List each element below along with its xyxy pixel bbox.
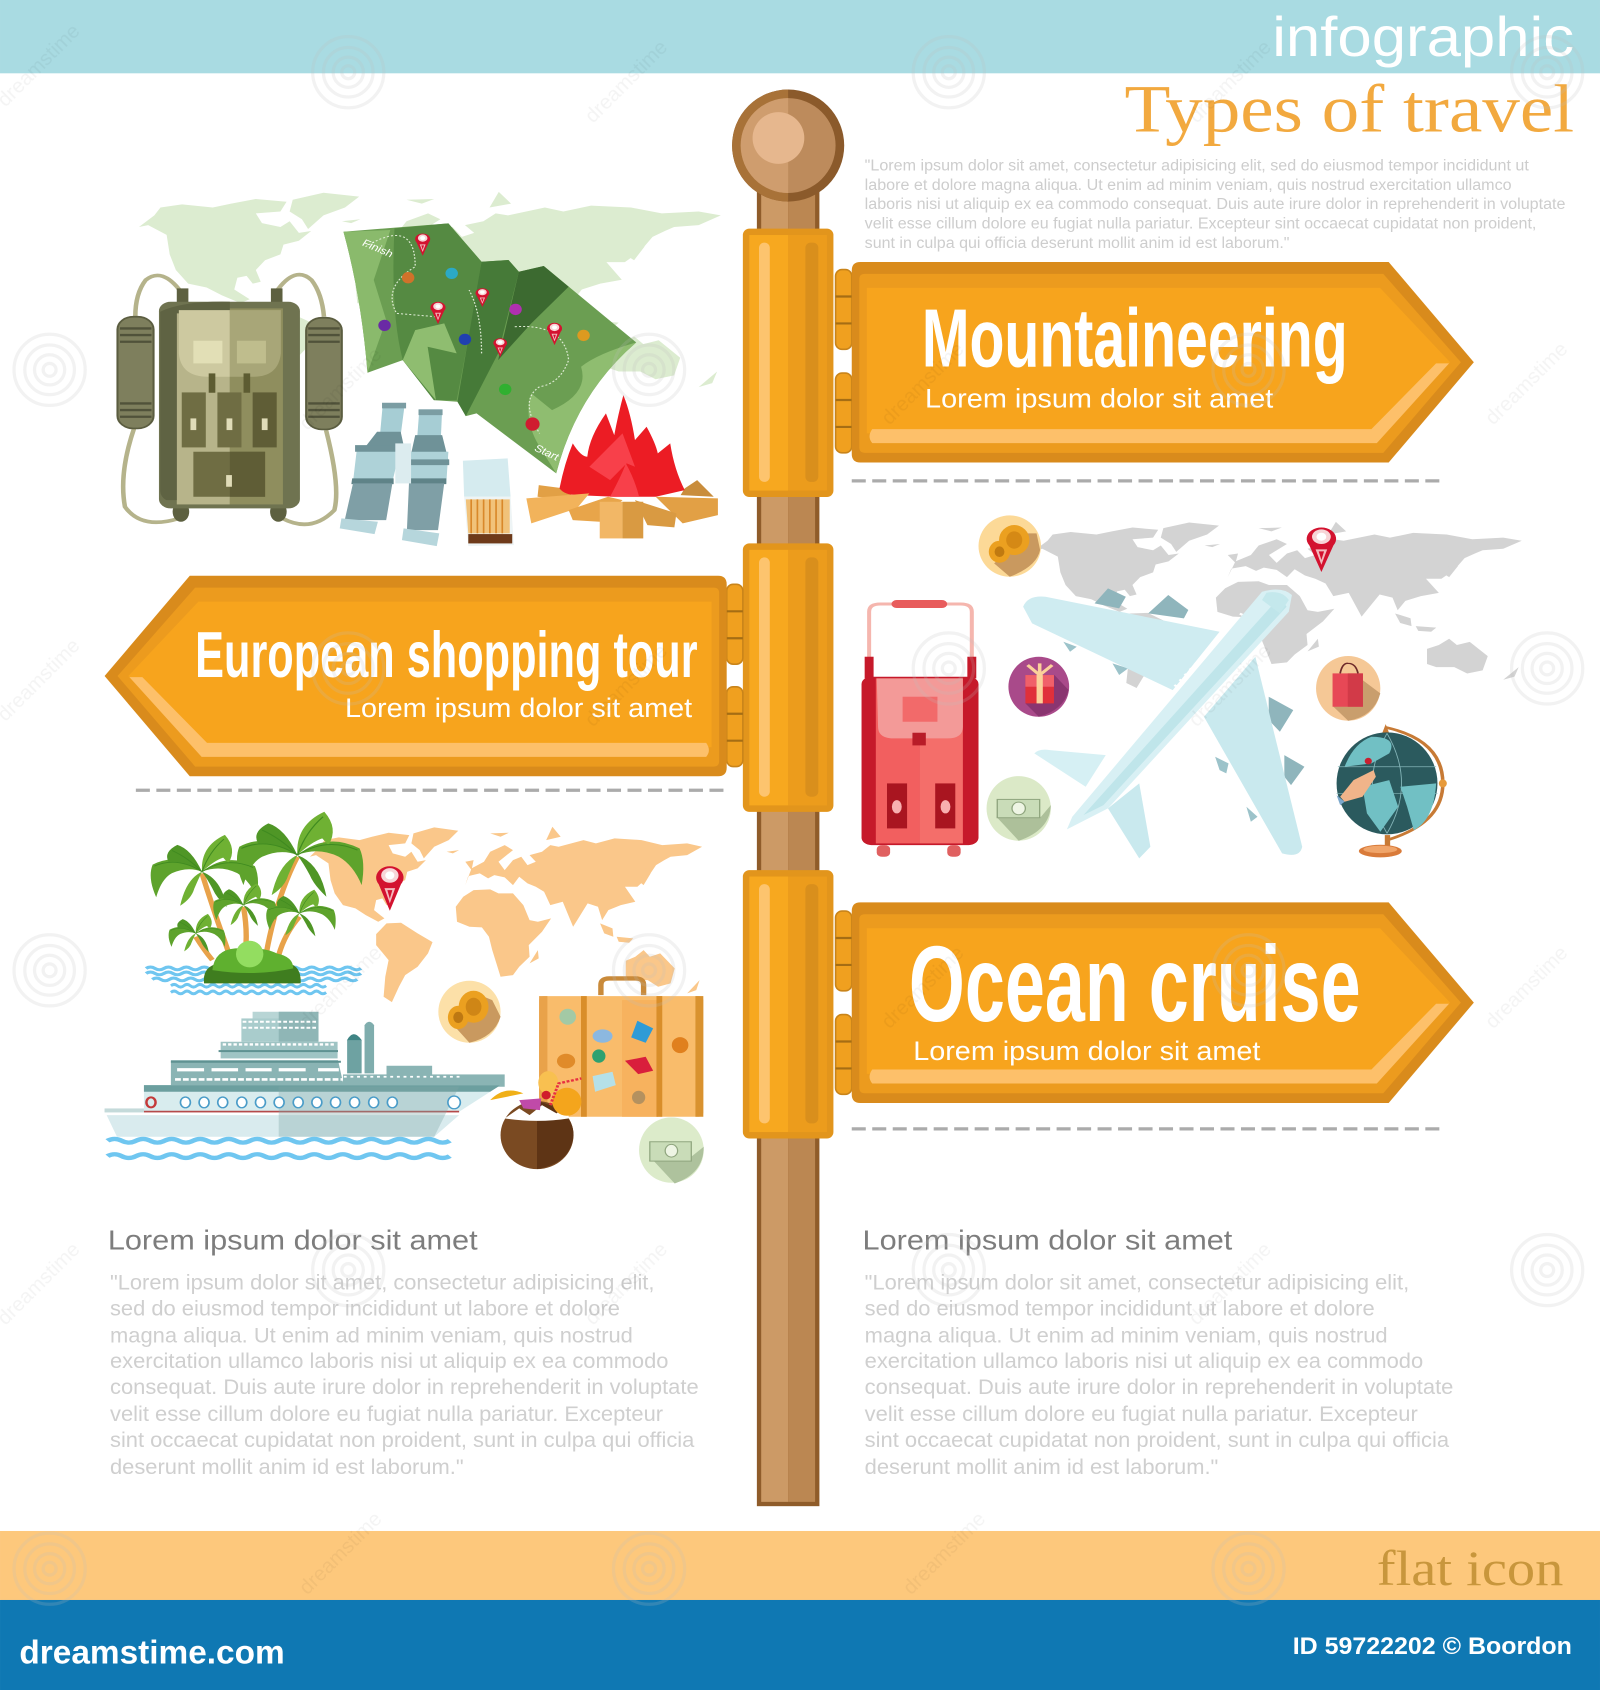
icon: folded map: Start [532, 443, 562, 463]
heading: Lorem ipsum dolor sit amet [863, 1225, 1233, 1256]
sign title: Ocean cruise [909, 923, 1361, 1044]
watermark: dreamstime [295, 941, 386, 1033]
paragraph: sint occaecat cupidatat non proident, sunt in culpa qui officia [110, 1427, 694, 1452]
sleeve 2 [743, 543, 833, 812]
sign subtitle: Lorem ipsum dolor sit amet [913, 1036, 1261, 1066]
text block: left [108, 1225, 699, 1479]
icon: airplane [1023, 588, 1304, 858]
paragraph: "Lorem ipsum dolor sit amet, consectetur adipisicing elit, [110, 1269, 654, 1294]
map: green world map [139, 192, 721, 397]
map: orange world map [310, 827, 702, 1002]
icon: money badge [639, 1117, 704, 1183]
sign: European shopping tour [105, 576, 743, 776]
knob [732, 89, 844, 202]
heading: infographic: infographic [1272, 5, 1574, 68]
panel: mountaineering illustrations [117, 192, 721, 546]
sign: Mountaineering [836, 262, 1474, 463]
icon: coconut cocktail [490, 1071, 581, 1169]
paragraph [110, 1269, 699, 1479]
sleeve 3 [743, 870, 833, 1139]
icon: globe [1337, 724, 1447, 857]
paragraph: "Lorem ipsum dolor sit amet, consectetur adipisicing elit, [865, 1269, 1409, 1294]
pole [732, 89, 844, 1506]
paragraph [865, 1269, 1453, 1479]
watermark: dreamstime [580, 1238, 672, 1330]
paragraph: deserunt mollit anim id est laborum." [110, 1454, 464, 1479]
icon: shopping bag badge [1316, 656, 1380, 721]
map: grey world map [1035, 522, 1522, 688]
top band [0, 0, 1600, 73]
icon: coins badge [438, 981, 501, 1043]
sign subtitle: Lorem ipsum dolor sit amet [925, 384, 1274, 414]
bottom band [0, 1531, 1600, 1600]
paragraph: magna aliqua. Ut enim ad minim veniam, quis nostrud [865, 1322, 1388, 1347]
icon: red suitcase [862, 600, 979, 857]
watermark: dreamstime [877, 941, 969, 1033]
paragraph: magna aliqua. Ut enim ad minim veniam, quis nostrud [110, 1322, 633, 1347]
sign title: Mountaineering [922, 292, 1348, 385]
icon: palm island [146, 812, 363, 994]
icon: cruise ship [105, 1012, 505, 1158]
watermark: dreamstime [295, 1507, 386, 1599]
panel: ocean cruise illustrations [105, 812, 704, 1183]
paragraph: velit esse cillum dolore eu fugiat nulla pariatur. Excepteur [865, 1401, 1418, 1426]
watermark: dreamstime [295, 343, 386, 435]
icon: matchbox [463, 458, 514, 546]
icon: binoculars [340, 403, 449, 546]
icon: tan suitcase [539, 978, 703, 1117]
paragraph: sed do eiusmod tempor incididunt ut labore et dolore [865, 1295, 1375, 1320]
intro paragraph: velit esse cillum dolore eu fugiat nulla pariatur. Excepteur sint occaecat cupidatat non proident, [865, 216, 1536, 233]
paragraph: velit esse cillum dolore eu fugiat nulla pariatur. Excepteur [110, 1401, 663, 1426]
paragraph: exercitation ullamco laboris nisi ut aliquip ex ea commodo [865, 1348, 1423, 1373]
panel: shopping tour illustrations [862, 515, 1522, 858]
title: Types of travel: Types of travel [1125, 71, 1574, 147]
paragraph: exercitation ullamco laboris nisi ut aliquip ex ea commodo [110, 1348, 668, 1373]
watermark: dreamstime [580, 639, 672, 731]
intro paragraph [865, 157, 1565, 252]
footer credit: ID 59722202 © Boordon [1293, 1634, 1572, 1660]
icon: gift badge [1008, 657, 1069, 717]
intro paragraph: labore et dolore magna aliqua. Ut enim ad minim veniam, quis nostrud exercitation ullamco [865, 177, 1512, 194]
heading: Lorem ipsum dolor sit amet [108, 1225, 478, 1256]
icon: money badge [987, 776, 1051, 841]
paragraph: consequat. Duis aute irure dolor in reprehenderit in voluptate [865, 1374, 1453, 1399]
icon: campfire [526, 395, 718, 538]
paragraph: sed do eiusmod tempor incididunt ut labore et dolore [110, 1295, 620, 1320]
sleeve 1 [743, 229, 833, 497]
icon: map pin [376, 866, 404, 911]
sign: Ocean cruise [836, 902, 1474, 1103]
text block: right [863, 1225, 1453, 1479]
sign title: European shopping tour [195, 618, 698, 691]
paragraph: consequat. Duis aute irure dolor in reprehenderit in voluptate [110, 1374, 699, 1399]
intro paragraph: laboris nisi ut aliquip ex ea commodo consequat. Duis aute irure dolor in reprehenderit in voluptate [865, 196, 1565, 213]
intro paragraph: "Lorem ipsum dolor sit amet, consectetur adipisicing elit, sed do eiusmod tempor incididunt ut [865, 157, 1530, 174]
watermark: dreamstime [1481, 941, 1572, 1033]
footer logo text: dreamstime.com [19, 1635, 285, 1672]
watermark: dreamstime [1184, 36, 1276, 128]
label: flat icon: flat icon [1377, 1541, 1564, 1596]
watermark: dreamstime [1481, 338, 1572, 429]
watermark: dreamstime [1184, 639, 1276, 731]
paragraph: deserunt mollit anim id est laborum." [865, 1454, 1218, 1479]
footer bar [0, 1600, 1600, 1690]
intro paragraph: sunt in culpa qui officia deserunt mollit anim id est laborum." [865, 235, 1289, 252]
watermark: dreamstime [1184, 1238, 1276, 1330]
watermark: dreamstime [898, 1507, 990, 1599]
icon: coins badge [979, 515, 1041, 577]
watermark: dreamstime [877, 338, 969, 429]
watermark: dreamstime [580, 36, 672, 128]
icon: backpack [117, 275, 342, 524]
sign subtitle: Lorem ipsum dolor sit amet [345, 693, 693, 723]
icon: folded map: Finish [360, 238, 395, 260]
icon: map pin [1307, 528, 1336, 572]
paragraph: sint occaecat cupidatat non proident, sunt in culpa qui officia [865, 1427, 1449, 1452]
icon: folded map [343, 223, 636, 473]
